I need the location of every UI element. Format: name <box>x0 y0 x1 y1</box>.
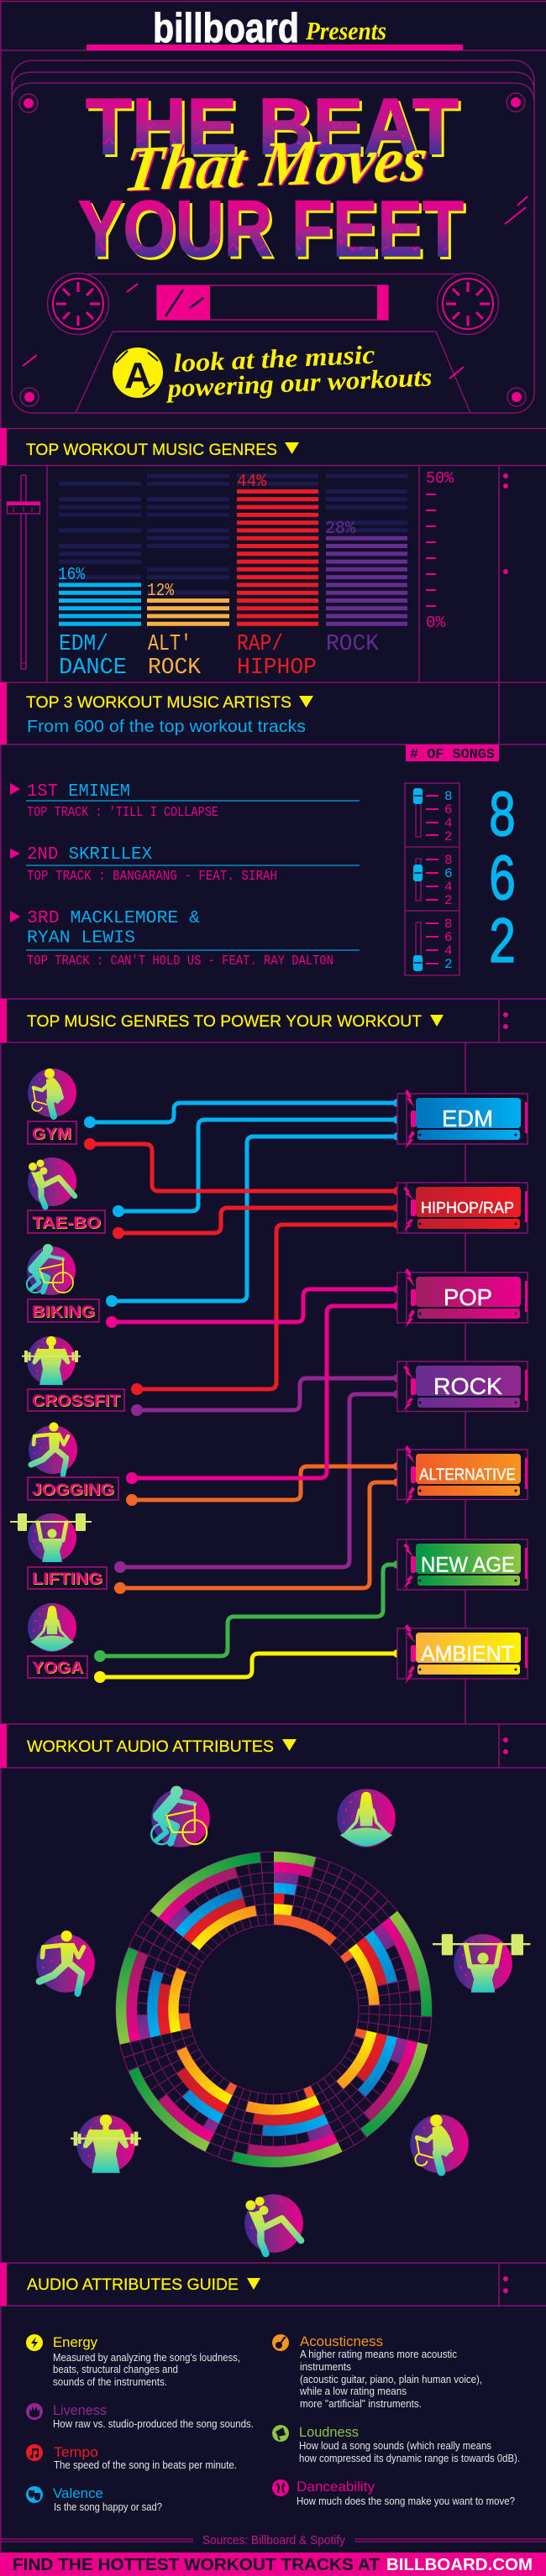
guide: valence <box>26 2485 162 2513</box>
workout: gym: GYM <box>32 1126 71 1143</box>
big counts <box>488 781 517 982</box>
guide: valence: Valence <box>53 2485 103 2501</box>
ring icon: yoga <box>337 1789 396 1847</box>
header logo <box>87 6 463 51</box>
big counts: 8 <box>488 781 517 855</box>
slider: 2 songs: 6 <box>444 930 453 945</box>
section heading: audio attributes guide: AUDIO ATTRIBUTES GUIDE <box>27 2276 239 2294</box>
workout: lifting <box>10 1513 107 1589</box>
guide: liveness: Liveness <box>53 2402 107 2418</box>
section heading: top workout music genres <box>0 428 299 465</box>
artist 3: macklemore and ryan lewis: 3RD MACKLEMORE & <box>27 908 200 928</box>
bar: alt rock 12%: 12% <box>147 582 174 601</box>
genre box: hiphop/rap: HIPHOP/RAP <box>421 1199 514 1216</box>
wire: crossfit to rock <box>131 1374 402 1416</box>
sector: gym <box>91 1826 457 2192</box>
footer banner <box>0 2552 546 2576</box>
guide: acousticness <box>272 2333 482 2410</box>
bar: edm/dance 16%: 16% <box>58 566 85 585</box>
wire: gym to edm <box>84 1099 402 1128</box>
sector: yoga <box>121 1857 427 2162</box>
bar: edm/dance 16% <box>58 566 141 681</box>
ring icon: jogging <box>36 1931 95 1993</box>
billboard wordmark: billboard <box>153 6 299 51</box>
guide: energy: sounds of the instruments. <box>53 2375 167 2388</box>
ring icon: lifting <box>433 1934 530 1993</box>
slider: 6 songs: 2 <box>444 893 453 908</box>
tagline <box>165 340 433 403</box>
artist 1: eminem <box>10 781 360 821</box>
percent scale: 50% <box>426 469 454 488</box>
artist 3: macklemore and ryan lewis: RYAN LEWIS <box>27 928 135 948</box>
guide: danceability: Danceability <box>297 2479 375 2495</box>
guide: acousticness: (acoustic guitar, piano, plain human voice), <box>300 2373 482 2385</box>
title: that moves: That Moves <box>120 123 432 205</box>
workout: yoga <box>28 1603 87 1678</box>
genre box: rock: ROCK <box>433 1373 502 1399</box>
right tape reel <box>437 274 499 334</box>
title: the beat: THE BEAT <box>86 82 459 171</box>
guide: tempo: The speed of the song in beats per minute. <box>54 2458 237 2471</box>
cassette illustration <box>12 60 534 413</box>
guide: valence: Is the song happy or sad? <box>54 2500 162 2513</box>
indicator dots <box>503 473 508 574</box>
corner screws <box>19 93 526 406</box>
wire: taebo to edm <box>113 1116 402 1217</box>
big counts: 6 <box>488 845 517 919</box>
tape window <box>157 285 388 320</box>
genre box: pop: POP <box>444 1284 492 1310</box>
bar: edm/dance 16%: EDM/ <box>59 632 108 657</box>
slider: 8 songs: 6 <box>444 802 453 818</box>
ring icon: crossfit <box>71 2114 141 2173</box>
workout: jogging <box>28 1422 118 1500</box>
artist 3: macklemore and ryan lewis <box>10 908 360 969</box>
section heading: genres to power your workout: TOP MUSIC GENRES TO POWER YOUR WORKOUT <box>27 1012 422 1031</box>
guide: energy: Energy <box>53 2334 97 2350</box>
artist 2: skrillex: 2ND SKRILLEX <box>27 844 152 865</box>
sector: crossfit <box>70 1805 478 2213</box>
percent scale: 0% <box>426 614 446 632</box>
section heading: genres to power your workout <box>0 999 508 1042</box>
slider: 8 songs <box>413 788 453 844</box>
bar: alt rock 12%: ALT' <box>148 632 192 657</box>
slider: 6 songs: 4 <box>444 880 453 895</box>
wire: yoga to new age <box>94 1560 402 1662</box>
genre box: rock <box>397 1361 528 1412</box>
workout: crossfit <box>22 1336 124 1411</box>
footer banner: BILLBOARD.COM <box>386 2556 533 2574</box>
slider: 2 songs: 4 <box>444 943 453 959</box>
sector: jogging <box>91 1826 457 2192</box>
slider: 6 songs: 6 <box>444 866 453 881</box>
badge: letter A: A <box>124 355 151 396</box>
genre box: edm <box>397 1089 528 1149</box>
sector: tae-bo <box>70 1805 478 2213</box>
genre box: ambient: AMBIENT <box>421 1642 514 1665</box>
badge: letter A <box>113 347 163 398</box>
section heading: top workout music genres: TOP WORKOUT MUSIC GENRES <box>26 441 277 459</box>
section heading: audio attributes guide <box>0 2263 508 2306</box>
percent scale <box>426 469 454 632</box>
genre box: alternative <box>397 1445 528 1505</box>
workout: biking <box>27 1244 99 1322</box>
presents script: Presents <box>305 16 386 45</box>
decorative slashes <box>23 196 528 379</box>
slider: 8 songs: 8 <box>444 789 453 804</box>
footer banner: FIND THE HOTTEST WORKOUT TRACKS AT <box>13 2556 380 2574</box>
bar: rock 28% <box>325 520 407 657</box>
artist 3: macklemore and ryan lewis: TOP TRACK : CAN'T HOLD US - FEAT. RAY DALTON <box>27 954 333 969</box>
artist 1: eminem: TOP TRACK : 'TILL I COLLAPSE <box>27 805 218 821</box>
sector: biking <box>60 1795 488 2223</box>
title: your feet: YOUR FEET <box>78 185 464 274</box>
workout: lifting: LIFTING <box>32 1570 102 1588</box>
sources line: Sources: Billboard & Spotify <box>202 2533 345 2547</box>
cassette body outlines <box>12 60 534 413</box>
genre box: new age: NEW AGE <box>421 1553 515 1576</box>
workout: gym <box>28 1069 76 1144</box>
section heading: workout audio attributes <box>0 1724 508 1768</box>
big counts: 2 <box>488 908 517 982</box>
genre box: alternative: ALTERNATIVE <box>419 1466 516 1484</box>
header pink bar <box>87 44 463 50</box>
slider: 2 songs <box>413 917 453 972</box>
artist 2: skrillex <box>10 844 360 885</box>
bar: rock 28%: ROCK <box>326 632 380 657</box>
slider: 2 songs: 8 <box>444 917 453 932</box>
wire: biking to pop <box>106 1285 402 1328</box>
wire: gym to hiphop <box>84 1138 402 1195</box>
workout: tae-bo <box>28 1157 105 1233</box>
ring icon: biking <box>151 1786 210 1847</box>
bar: rap/hiphop 44%: 44% <box>237 473 266 492</box>
workout: crossfit: CROSSFIT <box>32 1393 120 1410</box>
panel: genres chart <box>7 465 508 682</box>
unfilled bar rows <box>59 473 407 595</box>
ring icon: gym <box>410 2114 469 2173</box>
genre box: hiphop/rap <box>397 1183 528 1233</box>
guide: energy: beats, structural changes and <box>53 2363 178 2375</box>
wire: biking to edm <box>106 1132 402 1307</box>
bar: rock 28%: 28% <box>325 520 355 539</box>
sector: lifting <box>60 1795 488 2223</box>
section heading: workout audio attributes: WORKOUT AUDIO ATTRIBUTES <box>27 1737 274 1756</box>
guide: acousticness: instruments <box>300 2360 351 2373</box>
bar: alt rock 12%: ROCK <box>148 656 202 681</box>
guide: loudness: how compressed its dynamic range is towards 0dB). <box>299 2452 520 2464</box>
tagline: powering our workouts <box>165 362 433 403</box>
wire: crossfit to hiphop <box>131 1220 402 1395</box>
guide: liveness <box>26 2402 254 2430</box>
guide: danceability: How much does the song make you want to move? <box>297 2495 515 2507</box>
ring icon: tae-bo <box>244 2194 303 2254</box>
wire: taebo to hiphop <box>113 1204 402 1239</box>
sources line <box>0 2533 546 2547</box>
guide: acousticness: more "artificial" instruments. <box>300 2397 422 2410</box>
bar: rap/hiphop 44% <box>237 473 318 681</box>
chart grid <box>116 1852 432 2167</box>
wire: lifting to alternative <box>114 1478 402 1594</box>
guide: acousticness: A higher rating means more acoustic <box>300 2348 457 2360</box>
wire: yoga to ambient <box>94 1649 402 1683</box>
subheading: From 600 of the top workout tracks <box>27 718 306 736</box>
wire: jogging to alternative <box>126 1462 402 1506</box>
guide: loudness: How loud a song sounds (which really means <box>299 2439 491 2452</box>
guide: liveness: How raw vs. studio-produced the song sounds. <box>53 2417 254 2430</box>
guide: acousticness: Acousticness <box>300 2333 383 2349</box>
guide: tempo <box>26 2444 237 2471</box>
artist 2: skrillex: TOP TRACK : BANGARANG - FEAT. SIRAH <box>27 869 277 885</box>
guide: energy <box>26 2334 240 2388</box>
bar: edm/dance 16%: DANCE <box>59 656 127 681</box>
guide: danceability <box>272 2479 515 2507</box>
guide: tempo: Tempo <box>54 2444 98 2460</box>
bar: rap/hiphop 44%: HIPHOP <box>237 656 317 681</box>
guide: loudness: Loudness <box>299 2424 359 2440</box>
bar: alt rock 12% <box>147 582 229 681</box>
guide: energy: Measured by analyzing the song's loudness, <box>53 2351 240 2364</box>
guide: loudness <box>272 2424 520 2464</box>
slider: 2 songs: 2 <box>444 957 453 972</box>
workout: tae-bo: TAE-BO <box>32 1215 101 1232</box>
genre box: edm: EDM <box>442 1105 493 1131</box>
wire: jogging to pop <box>126 1302 402 1484</box>
slider: 8 songs: 2 <box>444 829 453 844</box>
workout: jogging: JOGGING <box>32 1481 114 1499</box>
slider: 6 songs <box>413 853 453 908</box>
song count sliders <box>405 783 459 975</box>
wire: lifting to rock <box>114 1390 402 1573</box>
connector wires <box>84 1099 402 1683</box>
workout: yoga: YOGA <box>32 1659 83 1677</box>
radial attributes chart <box>60 1795 488 2223</box>
mixer slider <box>7 475 40 669</box>
bar: rap/hiphop 44%: RAP/ <box>237 632 283 657</box>
tagline: look at the music <box>173 340 375 378</box>
slider: 6 songs: 8 <box>444 853 453 868</box>
workout: biking: BIKING <box>32 1304 95 1321</box>
artist 1: eminem: 1ST EMINEM <box>27 781 130 802</box>
left tape reel <box>47 274 109 334</box>
slider: 8 songs: 4 <box>444 816 453 831</box>
number of songs tag: # OF SONGS <box>410 747 495 763</box>
genre box: pop <box>397 1268 528 1328</box>
section heading: top 3 artists <box>0 682 313 745</box>
genre box: ambient <box>397 1624 528 1684</box>
genre box: new age <box>397 1539 528 1590</box>
guide: acousticness: while a low rating means <box>299 2385 407 2397</box>
section heading: top 3 artists: TOP 3 WORKOUT MUSIC ARTISTS <box>26 693 291 712</box>
